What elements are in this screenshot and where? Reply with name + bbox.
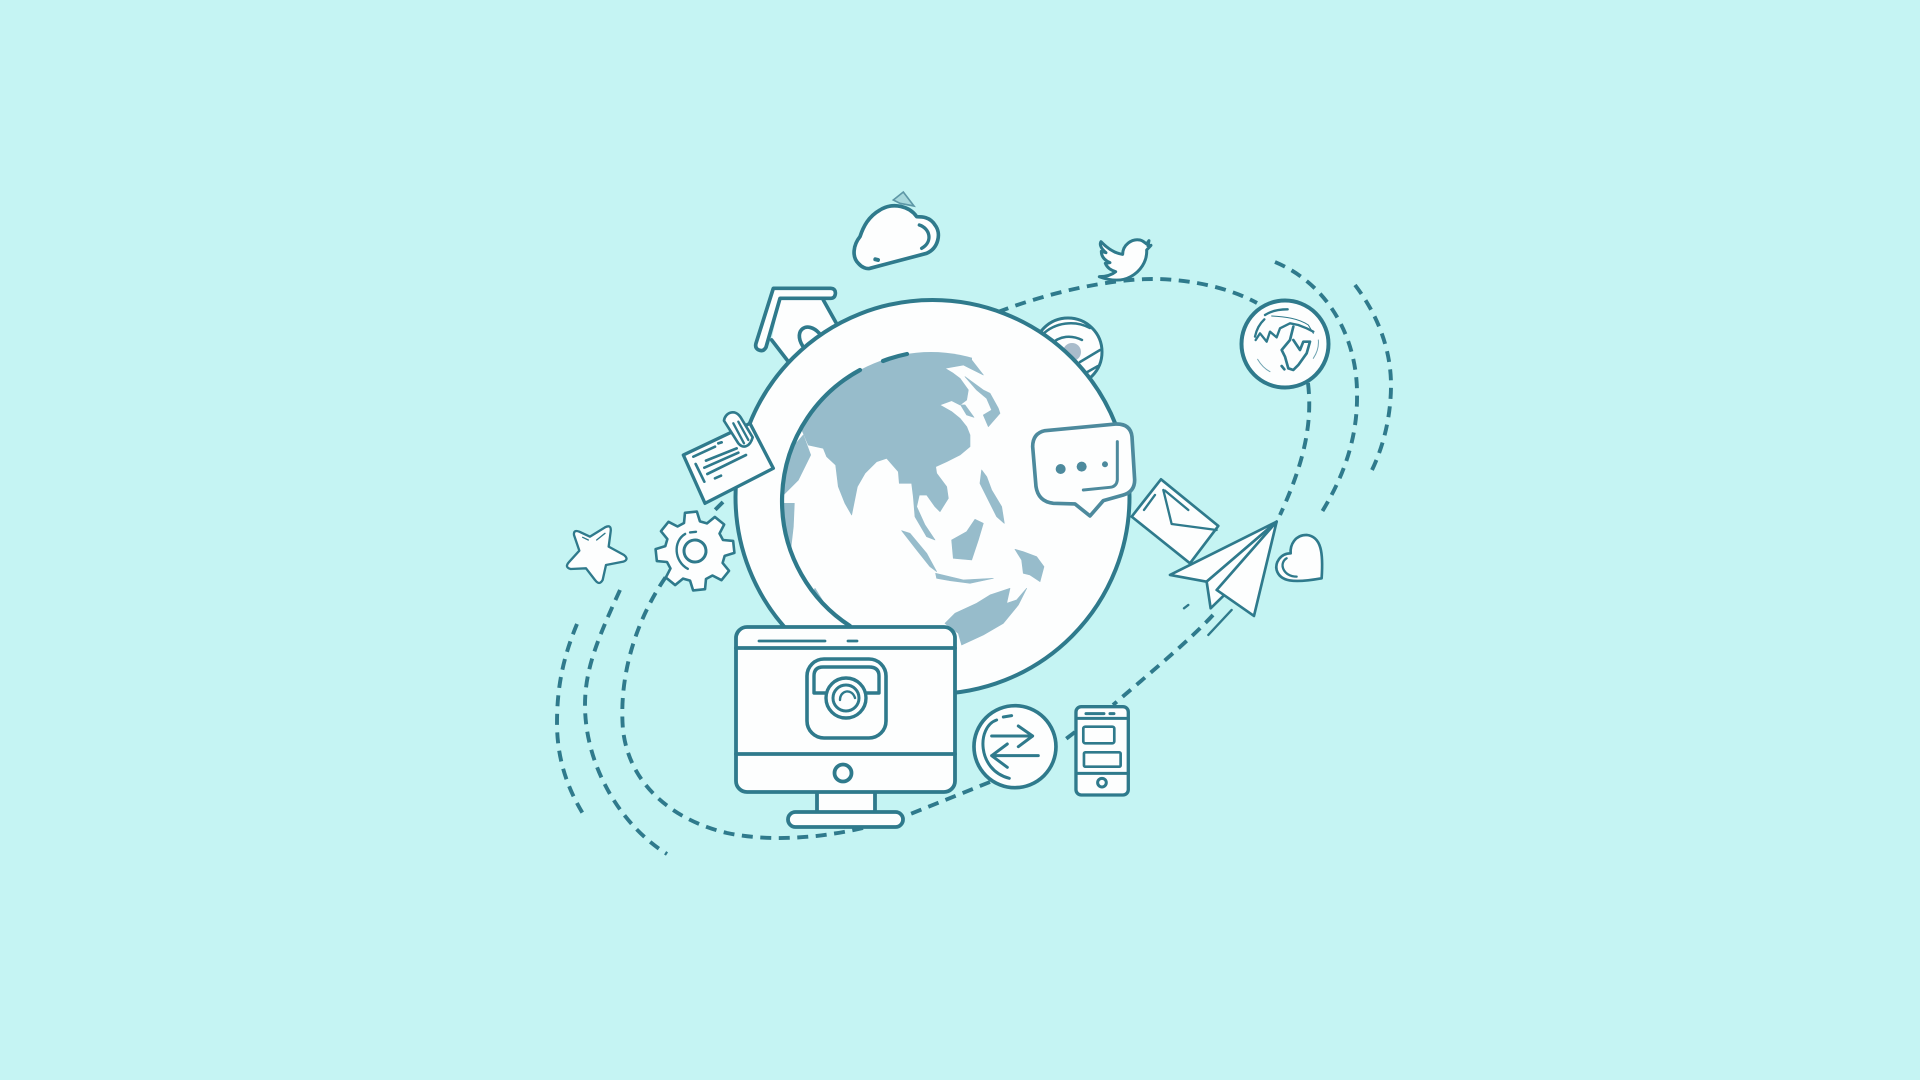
icon: speech bubble — [1033, 424, 1135, 516]
monitor screen — [736, 627, 955, 792]
icon: envelope — [1132, 479, 1218, 563]
illustration: globe with orbiting social icons — [555, 191, 1393, 856]
inner globe arc — [782, 354, 907, 626]
monitor stand — [817, 790, 875, 814]
small earth map outline — [1255, 309, 1318, 372]
world map — [770, 343, 1044, 602]
dashed orbit lines — [557, 262, 1391, 854]
icon: smartphone — [1076, 707, 1128, 795]
paper clip — [724, 412, 753, 447]
camera app icon — [807, 659, 886, 738]
icon: twitter bird — [1099, 240, 1151, 280]
monitor base — [788, 812, 903, 827]
icon: paper with clip — [683, 412, 773, 503]
icon: transfer arrows — [974, 706, 1056, 788]
icon: paper plane — [1170, 522, 1277, 635]
australia — [945, 588, 1027, 645]
icon: gear — [652, 508, 738, 594]
icon: heart — [1276, 535, 1322, 581]
globe — [736, 300, 1130, 694]
icon: cloud — [854, 192, 938, 269]
icon: star — [567, 526, 627, 583]
icon: house — [756, 288, 837, 362]
icon: desktop monitor with camera — [736, 627, 955, 827]
icon: wifi badge behind globe — [1034, 318, 1102, 386]
icon: small earth — [1242, 300, 1328, 388]
